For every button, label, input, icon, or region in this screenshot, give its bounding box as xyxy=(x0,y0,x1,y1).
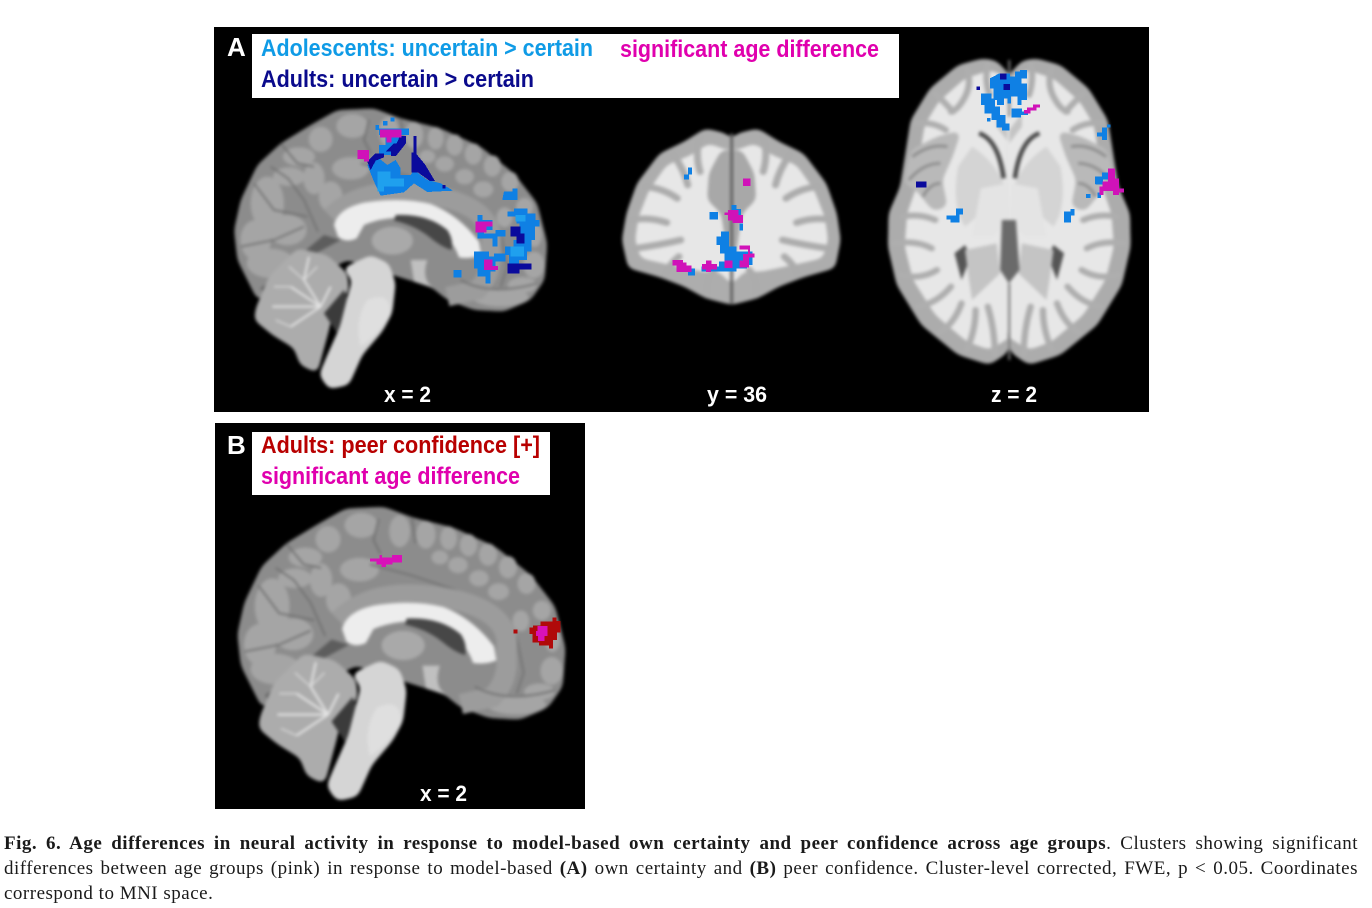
coordinate label x=2 B: x = 2 xyxy=(420,781,467,806)
figure caption: Fig. 6. Age differences in neural activity in response to model-based own certainty and peer confidence across age groups. Clusters showing significant xyxy=(4,833,1358,854)
coordinate label z=2: z = 2 xyxy=(991,382,1037,407)
coronal brain xyxy=(622,128,841,305)
activation clusters A sagittal xyxy=(357,117,540,283)
legend box B xyxy=(252,432,550,495)
legend: peer confidence: Adults: peer confidence [+] xyxy=(261,432,540,459)
figure caption: correspond to MNI space. xyxy=(4,883,213,904)
panel letter A: A xyxy=(227,32,246,62)
legend: significant age difference B: significant age difference xyxy=(261,463,520,490)
sagittal brain A xyxy=(234,108,547,389)
panel A background xyxy=(214,27,1149,412)
legend: adults: Adults: uncertain > certain xyxy=(261,66,534,93)
panel B background xyxy=(215,423,585,809)
coordinate label x=2: x = 2 xyxy=(384,382,431,407)
figure caption: differences between age groups (pink) in response to model-based (A) own certainty and (B) peer confidence. Cluster-level corrected, FWE, p < 0.05. Coordinates xyxy=(4,858,1358,879)
legend box A xyxy=(252,34,899,98)
legend: adolescents: Adolescents: uncertain > certain xyxy=(261,35,593,62)
legend: significant age difference: significant age difference xyxy=(620,36,879,63)
figure caption xyxy=(4,833,1358,904)
axial brain xyxy=(888,58,1131,365)
activation clusters axial xyxy=(916,70,1124,223)
panel letter B: B xyxy=(227,430,246,460)
sagittal brain B xyxy=(237,507,566,801)
activation clusters B xyxy=(370,555,560,648)
activation clusters coronal xyxy=(672,167,754,276)
coordinate label y=36: y = 36 xyxy=(707,382,767,407)
